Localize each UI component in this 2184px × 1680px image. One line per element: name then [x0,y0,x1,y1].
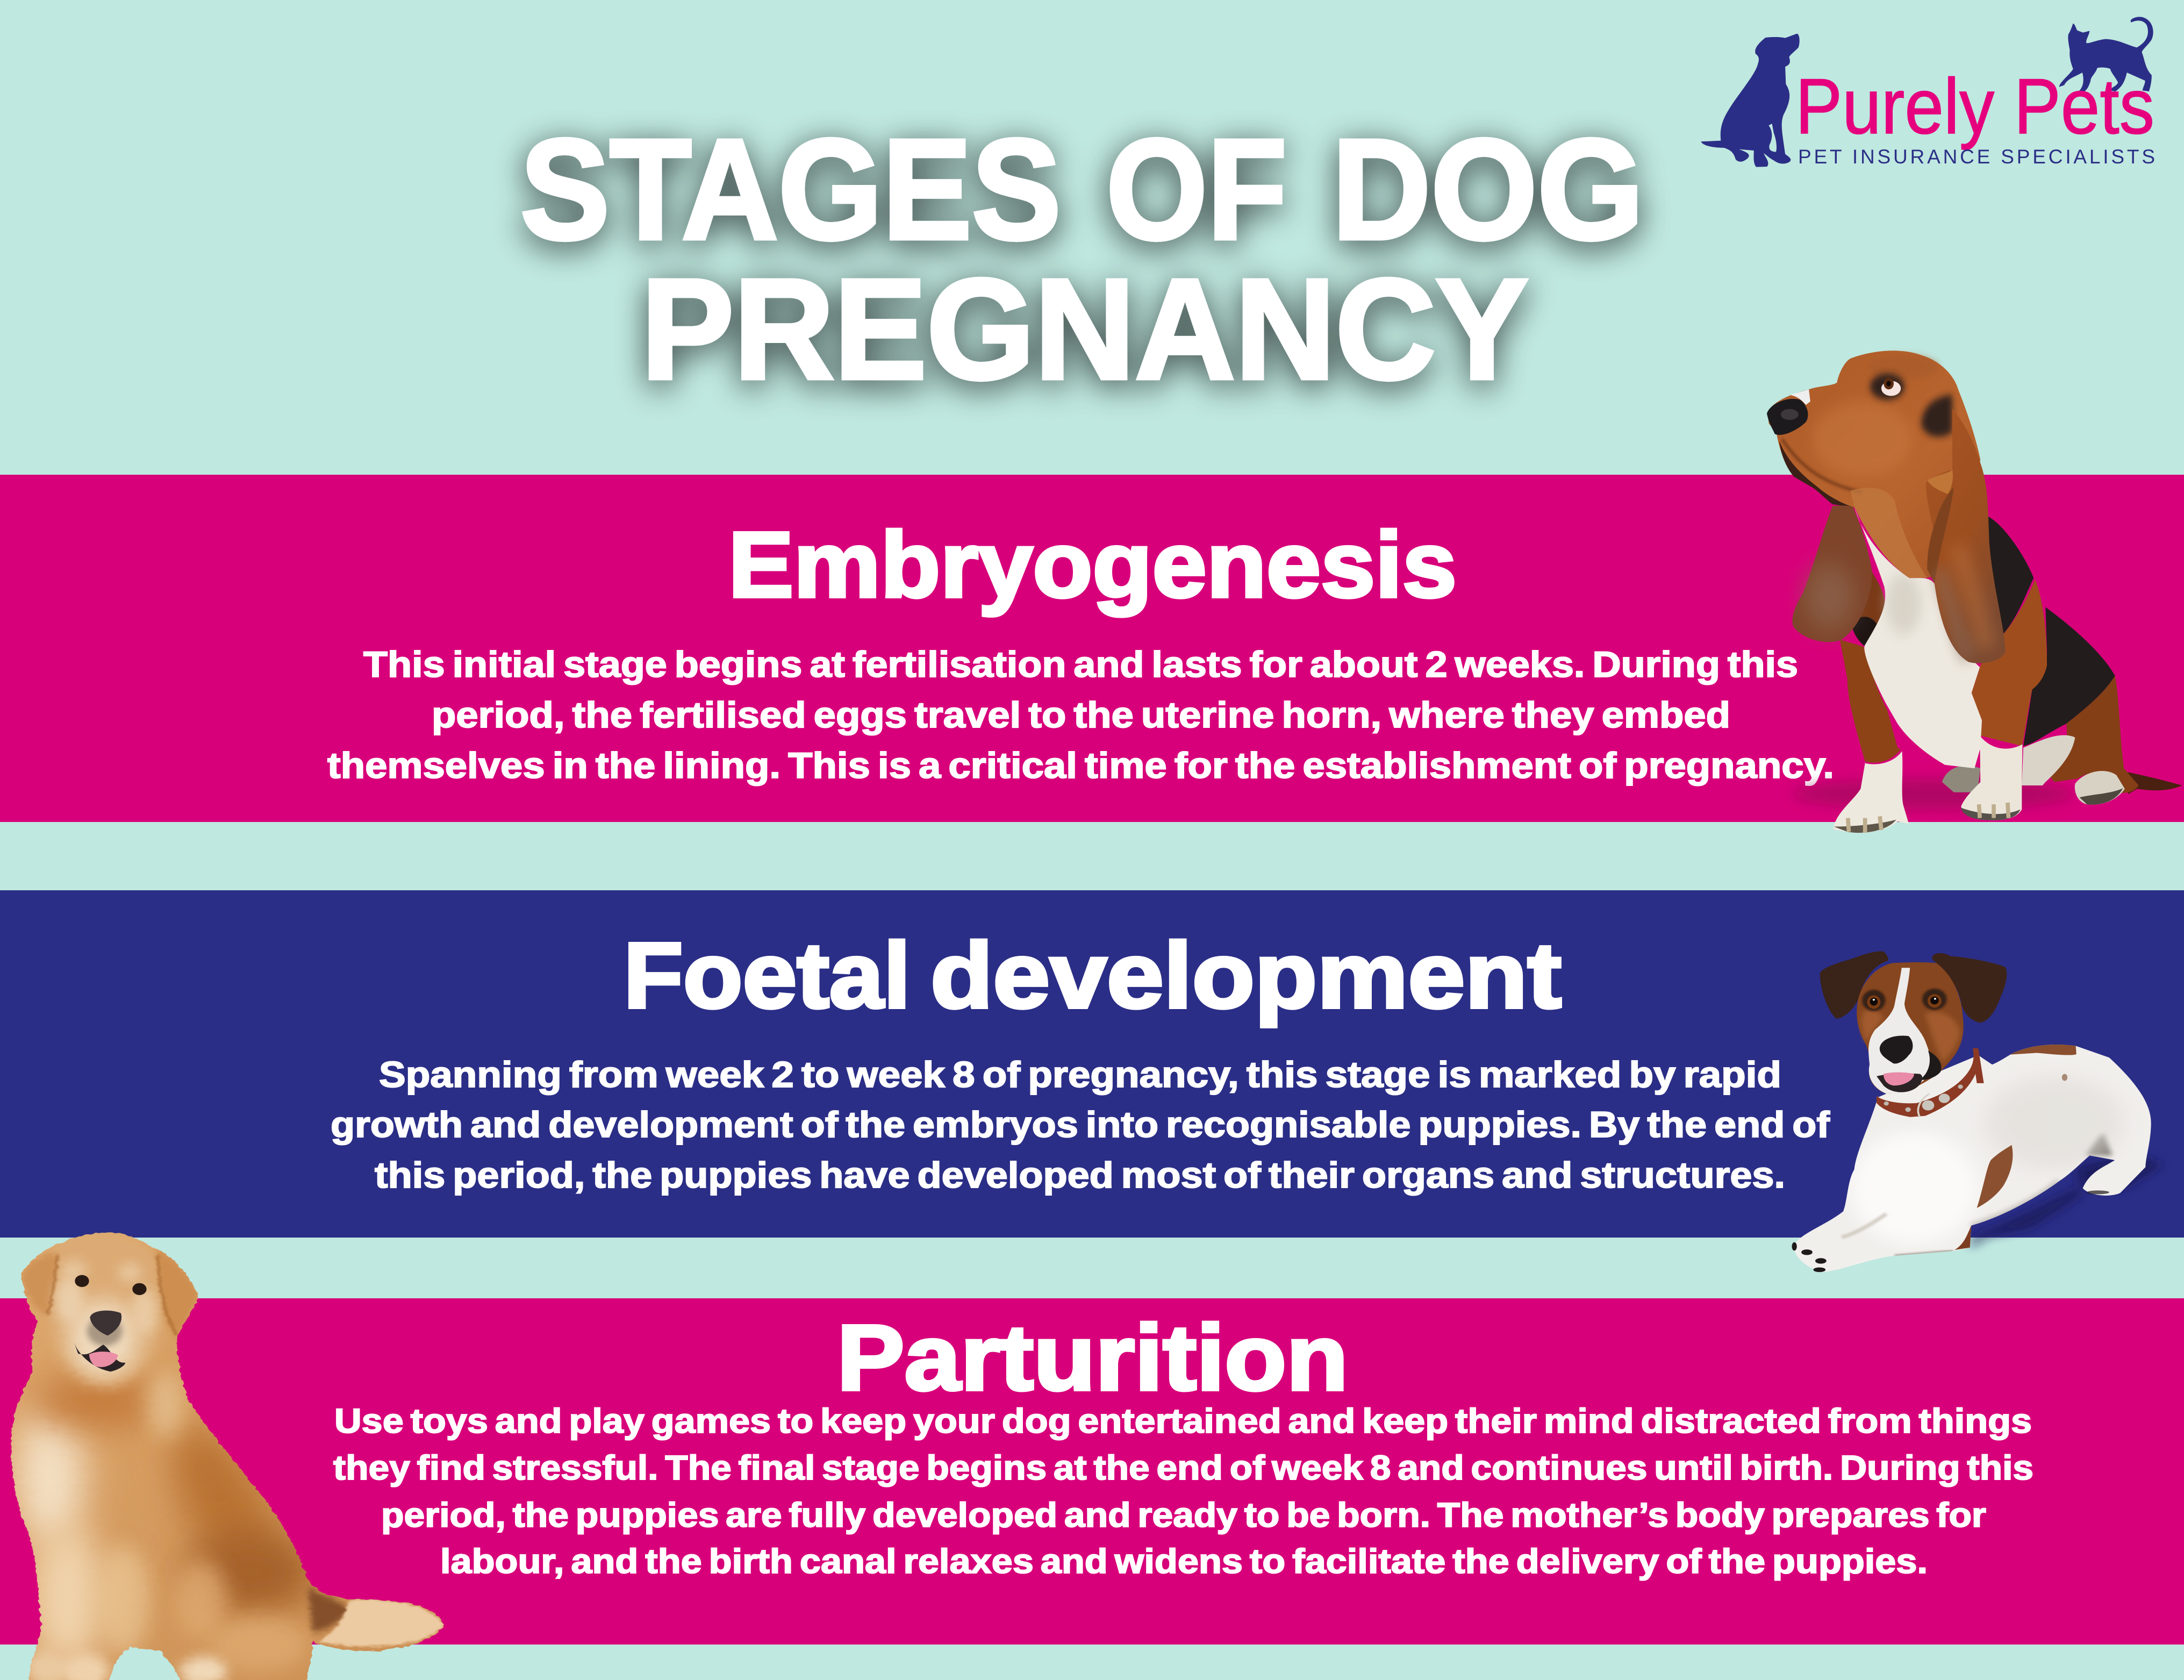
icon: golden retriever [0,1225,451,1680]
right ear [1926,408,2006,663]
text block: Parturition body: period, the puppies are fully developed and ready to be born. The mother’s body prepares for [381,1496,1986,1534]
ears [20,1253,58,1314]
muzzle dark [1920,1050,1941,1080]
rear paw [2075,771,2125,805]
text block: Embryogenesis body: This initial stage begins at fertilisation and lasts for about 2 weeks. During this [363,644,1798,685]
title: PREGNANCY [641,249,1528,409]
blaze and muzzle [1868,968,1931,1094]
mouth [74,1343,125,1371]
icon: cat silhouette [2059,17,2153,92]
text block: Foetal development body: this period, the puppies have developed most of their organs and structures. [375,1155,1785,1196]
dark patch [1921,395,1952,437]
text block: Foetal development body [331,1054,1830,1196]
panel: Foetal development [0,890,2184,1238]
right ear [1932,953,2007,1023]
heading: Foetal development: development [930,923,1562,1027]
ear creases [47,1255,177,1335]
eyes [75,1275,89,1287]
text block: Foetal development body: growth and development of the embryos into recognisable puppies. By the end of [331,1104,1830,1145]
tongue [89,1352,118,1367]
black saddle [1980,516,2033,637]
text block: Parturition body: Use toys and play games to keep your dog entertained and keep their mind distracted from things [334,1402,2032,1440]
text block: Parturition body: they find stressful. The final stage begins at the end of week 8 and continues until birth. During this [333,1448,2033,1487]
text block: Embryogenesis body [327,644,1834,786]
head [45,1232,164,1385]
icon: jack russell terrier [1792,951,2159,1272]
heading: Foetal development [624,923,1562,1027]
white chest [1854,507,1982,768]
panel: Embryogenesis [0,475,2184,822]
icon: basset hound [1767,351,2182,833]
nose [1767,399,1808,435]
head [1767,351,1980,578]
nose [1880,1036,1913,1063]
brown and dark under ear [1852,573,1885,647]
heading: Embryogenesis: Embryogenesis [728,512,1457,617]
front leg with sock [1961,736,2022,820]
title [520,110,1644,409]
muzzle dark [87,1316,123,1346]
tail [2125,772,2182,794]
left front leg [1840,640,1901,763]
panel: Parturition [0,1298,2184,1645]
title: DOG [1332,110,1644,269]
text block: Embryogenesis body: period, the fertilised eggs travel to the uterine horn, where they embed [432,695,1730,735]
text block: Embryogenesis body: themselves in the lining. This is a critical time for the establishment of pregnancy. [327,745,1834,786]
title: STAGES [520,110,1061,269]
left ear [1792,505,1872,642]
brown side spot [1977,1145,2013,1208]
tail [308,1588,351,1633]
shoulder [1972,580,2047,746]
icon: dog silhouette [1701,34,1800,167]
elbow [1954,1225,1971,1250]
text block: Parturition body: labour, and the birth canal relaxes and widens to facilitate the delivery of the puppies. [440,1542,1928,1581]
eyes [1862,990,1886,1011]
rear black [2023,607,2115,746]
title: OF [1106,110,1287,269]
shadow [1970,1158,2159,1249]
head [1857,962,1964,1094]
mouth [1877,1074,1922,1092]
brown back spot [2010,1045,2076,1055]
face light [68,1299,139,1377]
logo tagline: PET INSURANCE SPECIALISTS [1798,146,2155,168]
collar [1877,1048,1984,1117]
text block: Parturition body [333,1402,2033,1581]
body [1794,1045,2151,1272]
rear leg [2049,676,2139,793]
paw claws [1792,1190,2109,1272]
logo: Purely Pets [1701,17,2155,168]
left ear [1820,951,1888,1019]
blaze [1791,389,1810,405]
lower paws [26,1650,68,1680]
eye [1870,374,1904,400]
text block: Foetal development body: Spanning from week 2 to week 8 of pregnancy, this stage is marked by rapid [379,1054,1781,1095]
white belly [2022,735,2075,785]
nose [90,1311,121,1335]
tongue [1884,1073,1914,1085]
fur tones [15,1402,85,1546]
head highlight [1812,402,1913,477]
far paw [1942,766,1980,792]
heading: Parturition: Parturition [837,1305,1348,1410]
heading: Foetal development: Foetal [624,923,911,1027]
body shading [1842,1076,2123,1256]
